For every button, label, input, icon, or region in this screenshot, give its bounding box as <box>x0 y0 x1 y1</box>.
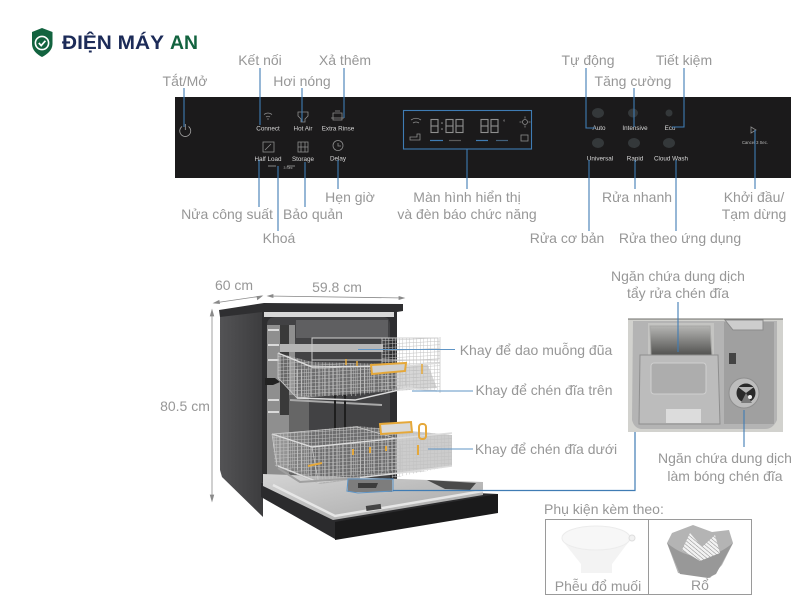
dimension labels <box>160 277 362 414</box>
panel labels: Rửa cơ bản <box>530 230 604 246</box>
panel labels: Rửa theo ứng dụng <box>619 230 741 246</box>
dimension labels: 59.8 cm <box>312 279 362 295</box>
button labels left <box>255 111 355 170</box>
panel labels: Nửa công suất <box>181 206 273 222</box>
detergent box on door <box>348 479 392 492</box>
callout lines <box>184 68 755 231</box>
panel labels <box>163 52 786 246</box>
button labels left: Delay <box>330 156 347 162</box>
button labels left: Storage <box>292 156 315 163</box>
digital display <box>404 110 532 149</box>
button labels right: Cloud Wash <box>654 156 689 162</box>
panel labels: Hẹn giờ <box>325 189 375 205</box>
rack labels: Khay để chén đĩa trên <box>476 382 612 398</box>
panel labels: và đèn báo chức năng <box>397 206 537 222</box>
button labels right: Universal <box>587 156 613 162</box>
panel labels: Tiết kiệm <box>656 52 712 68</box>
panel labels: Khoá <box>263 230 296 246</box>
dimension arrows <box>210 294 404 501</box>
panel labels: Hơi nóng <box>273 73 331 89</box>
dishwasher illustration <box>219 303 498 540</box>
dispenser labels: Ngăn chứa dung dịch <box>611 268 745 284</box>
dispenser labels: làm bóng chén đĩa <box>667 468 783 484</box>
button labels left: Connect <box>256 126 280 132</box>
panel labels: Tự động <box>562 52 614 68</box>
button labels left: 3 Sec <box>284 166 293 170</box>
interior <box>267 317 390 484</box>
panel labels: Rửa nhanh <box>602 189 672 205</box>
button labels right <box>587 108 689 162</box>
panel labels: Tắt/Mở <box>163 73 207 89</box>
button labels right: Eco <box>665 125 676 132</box>
dispenser labels <box>611 268 792 484</box>
button labels right: Intensive <box>622 125 648 132</box>
icon: basket <box>667 525 733 578</box>
rack labels: Khay để chén đĩa dưới <box>475 441 617 457</box>
body side <box>220 306 263 517</box>
lower rack <box>272 422 452 484</box>
dimension labels: 60 cm <box>215 277 253 293</box>
digital display: ° <box>503 120 506 126</box>
button labels left: Half Load <box>255 156 282 163</box>
dimension labels: 80.5 cm <box>160 398 210 414</box>
basket label: Rổ <box>691 577 709 593</box>
brand name accent: AN <box>170 32 198 54</box>
rack labels <box>460 342 617 457</box>
button labels right: Rapid <box>627 156 644 162</box>
panel labels: Bảo quản <box>283 206 343 222</box>
start / pause button <box>742 127 768 145</box>
accessories heading: Phụ kiện kèm theo: <box>544 501 664 517</box>
rack labels: Khay để dao muỗng đũa <box>460 342 612 358</box>
upper rack <box>265 337 440 400</box>
door open inner <box>261 483 498 539</box>
button labels right: Auto <box>593 125 606 132</box>
icon: salt funnel <box>562 526 635 573</box>
button labels left: Hot Air <box>294 126 312 132</box>
panel labels: Tạm dừng <box>722 206 786 222</box>
panel labels: Xả thêm <box>319 52 371 68</box>
logo: Điện Máy An <box>32 28 198 57</box>
dispenser callout lines <box>678 302 744 447</box>
funnel label: Phễu đổ muối <box>555 578 641 594</box>
icon: shield check <box>32 28 52 57</box>
panel labels: Màn hình hiển thị <box>413 189 521 205</box>
accessories table <box>546 520 752 594</box>
start / pause button: Cancel 3 Sec. <box>742 140 768 145</box>
icon: power button <box>180 124 191 136</box>
rack callouts <box>358 350 635 490</box>
brand name: ĐIỆN MÁY <box>62 30 164 54</box>
button labels left: Extra Rinse <box>322 126 355 132</box>
panel labels: Khởi đầu/ <box>724 189 784 205</box>
dispenser labels: Ngăn chứa dung dịch <box>658 450 792 466</box>
top <box>219 303 403 317</box>
accessories <box>544 501 752 594</box>
photo: detergent dispenser <box>628 319 783 432</box>
panel labels: Kết nối <box>238 52 282 68</box>
front frame <box>262 311 397 482</box>
dispenser labels: tẩy rửa chén đĩa <box>627 285 729 301</box>
control panel <box>175 97 791 178</box>
panel labels: Tăng cường <box>595 73 671 89</box>
